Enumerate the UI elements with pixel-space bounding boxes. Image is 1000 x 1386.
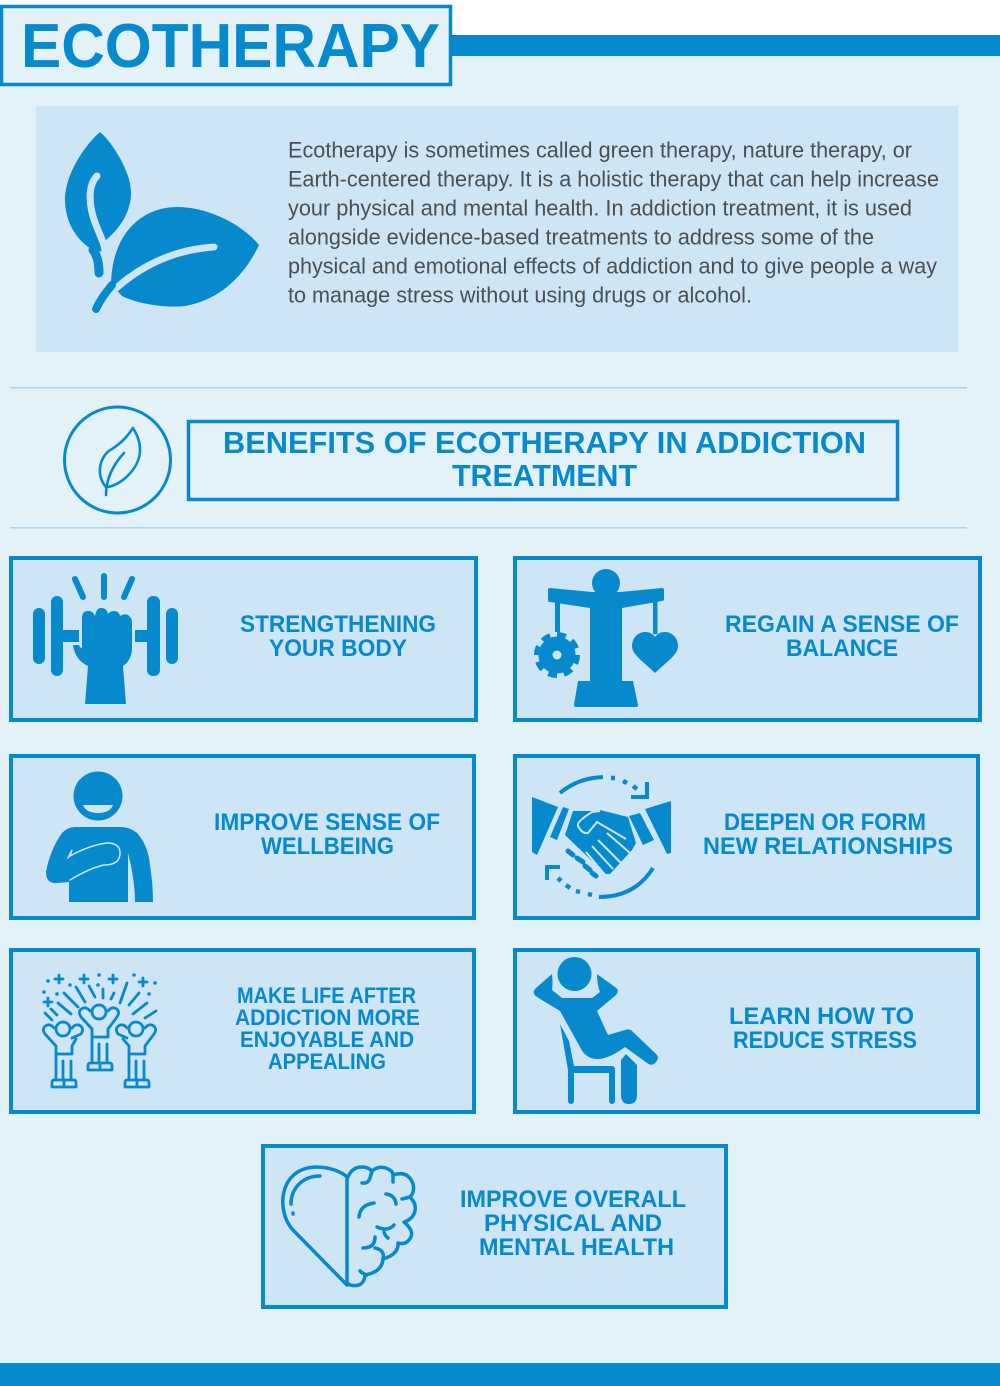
label [235, 983, 420, 1074]
label: PHYSICAL AND [484, 1210, 662, 1237]
panel: improve overall health [263, 1146, 726, 1307]
intro text: to manage stress without using drugs or alcohol. [288, 282, 752, 308]
label: APPEALING [268, 1049, 386, 1074]
label: IMPROVE SENSE OF [214, 809, 440, 836]
icon: two leaves [65, 132, 259, 309]
label: WELLBEING [261, 833, 394, 860]
intro text: alongside evidence-based treatments to address some of the [288, 224, 874, 250]
panel: strengthening your body [11, 558, 476, 720]
label: REGAIN A SENSE OF [725, 611, 959, 638]
intro text [288, 138, 939, 308]
panel: improve sense of wellbeing [11, 756, 474, 918]
header bar [450, 35, 1000, 56]
intro text: physical and emotional effects of addiction and to give people a way [288, 254, 937, 278]
label [703, 809, 953, 860]
label: REDUCE STRESS [733, 1027, 917, 1054]
icon: relaxing person in chair [534, 957, 658, 1104]
icon: leaf in circle [64, 407, 170, 513]
label: BALANCE [786, 635, 898, 662]
label: ADDICTION MORE [235, 1005, 420, 1030]
label [214, 809, 440, 860]
label [460, 1186, 686, 1261]
intro text: Ecotherapy is sometimes called green therapy, nature therapy, or [288, 138, 912, 162]
label: YOUR BODY [269, 635, 407, 662]
icon: balance scale [538, 569, 678, 707]
section heading: BENEFITS OF ECOTHERAPY IN ADDICTION [223, 425, 866, 460]
icon: fist with dumbbell [33, 576, 178, 704]
intro text: your physical and mental health. In addiction treatment, it is used [288, 196, 912, 220]
label [729, 1003, 917, 1054]
label: NEW RELATIONSHIPS [703, 833, 953, 860]
label [725, 611, 959, 662]
label: ENJOYABLE AND [240, 1027, 414, 1052]
panel: learn how to reduce stress [515, 950, 978, 1112]
panel: introduction [36, 106, 958, 352]
section heading: TREATMENT [452, 458, 637, 493]
label: LEARN HOW TO [729, 1003, 914, 1030]
panel: make life after addiction more enjoyable [11, 950, 474, 1112]
icon: handshake [532, 777, 671, 897]
icon: celebrating people [42, 973, 157, 1087]
title: ECOTHERAPY [21, 12, 440, 81]
panel: deepen or form new relationships [515, 756, 978, 918]
label: IMPROVE OVERALL [460, 1186, 686, 1213]
footer bar [0, 1363, 1000, 1386]
label: STRENGTHENING [240, 611, 436, 638]
panel: regain a sense of balance [515, 558, 980, 720]
label: DEEPEN OR FORM [724, 809, 926, 836]
intro text: Earth-centered therapy. It is a holistic therapy that can help increase [288, 166, 939, 192]
label: MENTAL HEALTH [479, 1234, 674, 1261]
label [240, 611, 436, 662]
icon: heart and brain [283, 1167, 415, 1286]
label: MAKE LIFE AFTER [237, 983, 416, 1008]
section heading [188, 422, 898, 500]
icon: smiling person [46, 772, 153, 902]
